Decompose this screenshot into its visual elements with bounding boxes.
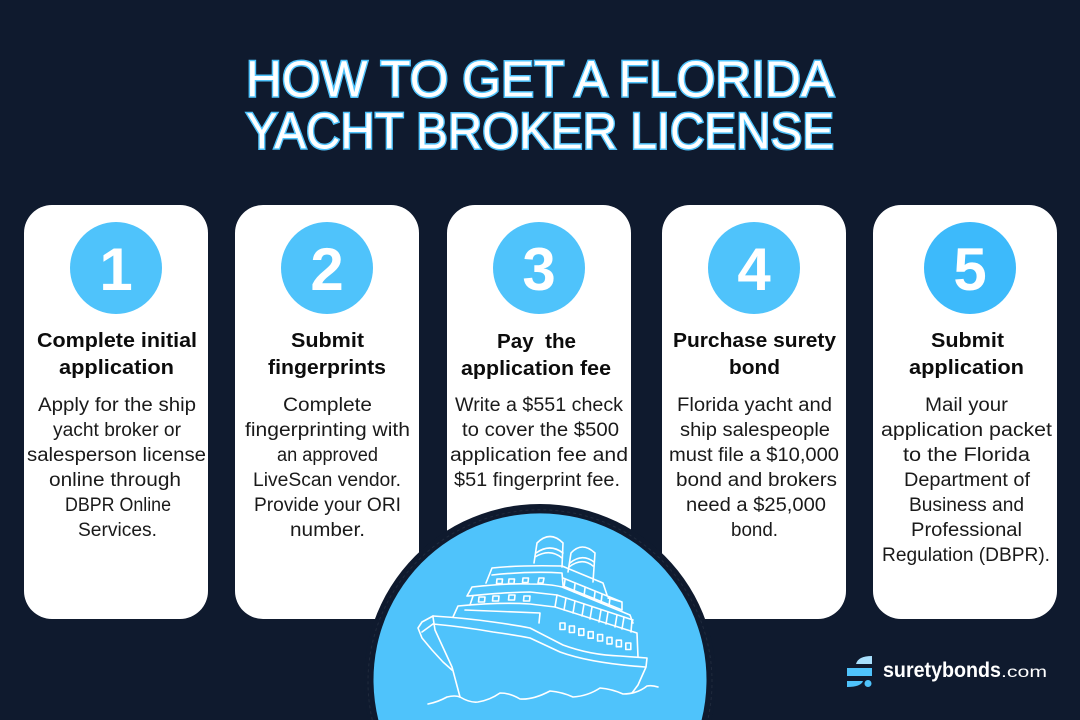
text: step 3: to cover the $500: [462, 420, 619, 441]
text: step 5: Regulation (DBPR).: [882, 545, 1050, 566]
title: YACHT BROKER LICENSE: [246, 102, 834, 160]
title: HOW TO GET A FLORIDA: [246, 50, 834, 108]
heading: step 3: application fee: [461, 358, 611, 380]
text: step 2: fingerprinting with: [245, 420, 410, 441]
panel: step 1: [24, 205, 208, 619]
heading: step 4: [673, 330, 837, 379]
heading: step 3: [461, 331, 611, 380]
text: step 1: online through: [49, 470, 181, 491]
number badge 4: [708, 222, 800, 314]
heading: step 5: [909, 330, 1024, 379]
text: step 2: an approved: [277, 445, 378, 466]
text: step 5: to the Florida: [903, 445, 1030, 466]
text: step 1: yacht broker or: [53, 420, 182, 441]
icon: logo mark: [847, 656, 872, 687]
logo suffix: .com: [1001, 664, 1047, 681]
text: step 2: Provide your ORI: [254, 495, 401, 516]
number badge 3: 3: [522, 236, 556, 303]
text: step 1: [27, 395, 206, 541]
number badge 5: [924, 222, 1016, 314]
text: step 4: [669, 395, 839, 541]
heading: step 5: Submit: [931, 330, 1004, 352]
number badge 3: [493, 222, 585, 314]
text: step 2: [245, 395, 410, 541]
text: step 4: bond.: [731, 520, 778, 541]
text: step 5: [881, 395, 1053, 566]
title: [246, 50, 834, 160]
text: step 3: [450, 395, 628, 491]
heading: step 5: application: [909, 357, 1024, 379]
heading: step 4: bond: [729, 357, 780, 379]
text: step 5: Department of: [904, 470, 1031, 491]
text: step 4: must file a $10,000: [669, 445, 839, 466]
text: step 2: Complete: [283, 395, 372, 416]
text: step 4: need a $25,000: [686, 495, 826, 516]
text: step 5: Business and: [909, 495, 1024, 516]
icon: cruise ship: [418, 536, 658, 704]
heading: step 3: Pay the: [497, 331, 576, 353]
text: step 1: DBPR Online: [65, 495, 171, 516]
heading: step 4: Purchase surety: [673, 330, 837, 352]
number badge 2: [281, 222, 373, 314]
number badge 4: 4: [737, 236, 771, 303]
text: step 4: bond and brokers: [676, 470, 837, 491]
ship medallion: [364, 504, 716, 720]
text: step 3: Write a $551 check: [455, 395, 624, 416]
text: step 1: Apply for the ship: [38, 395, 196, 416]
text: step 1: salesperson license: [27, 445, 206, 466]
logo: suretybonds.com: [847, 656, 1047, 687]
panel: step 4: [662, 205, 846, 619]
panel: step 3: [447, 205, 631, 619]
heading: step 2: [268, 330, 386, 379]
text: step 5: Professional: [911, 520, 1022, 541]
text: step 3: $51 fingerprint fee.: [454, 470, 620, 491]
panel: step 2: [235, 205, 419, 619]
text: step 4: ship salespeople: [680, 420, 830, 441]
text: step 5: Mail your: [925, 395, 1009, 416]
text: step 4: Florida yacht and: [677, 395, 832, 416]
heading: step 2: Submit: [291, 330, 364, 352]
number badge 5: 5: [953, 236, 987, 303]
heading: step 1: [37, 330, 197, 379]
text: step 5: application packet: [881, 420, 1053, 441]
panel: step 5: [873, 205, 1057, 619]
number badge 1: [70, 222, 162, 314]
number badge 1: 1: [99, 236, 133, 303]
text: step 2: number.: [290, 520, 365, 541]
text: step 2: LiveScan vendor.: [253, 470, 401, 491]
heading: step 2: fingerprints: [268, 357, 386, 379]
number badge 2: 2: [310, 236, 344, 303]
text: step 3: application fee and: [450, 445, 628, 466]
heading: step 1: application: [59, 357, 174, 379]
text: step 1: Services.: [78, 520, 157, 541]
logo wordmark: suretybonds: [883, 659, 1001, 682]
heading: step 1: Complete initial: [37, 330, 197, 352]
